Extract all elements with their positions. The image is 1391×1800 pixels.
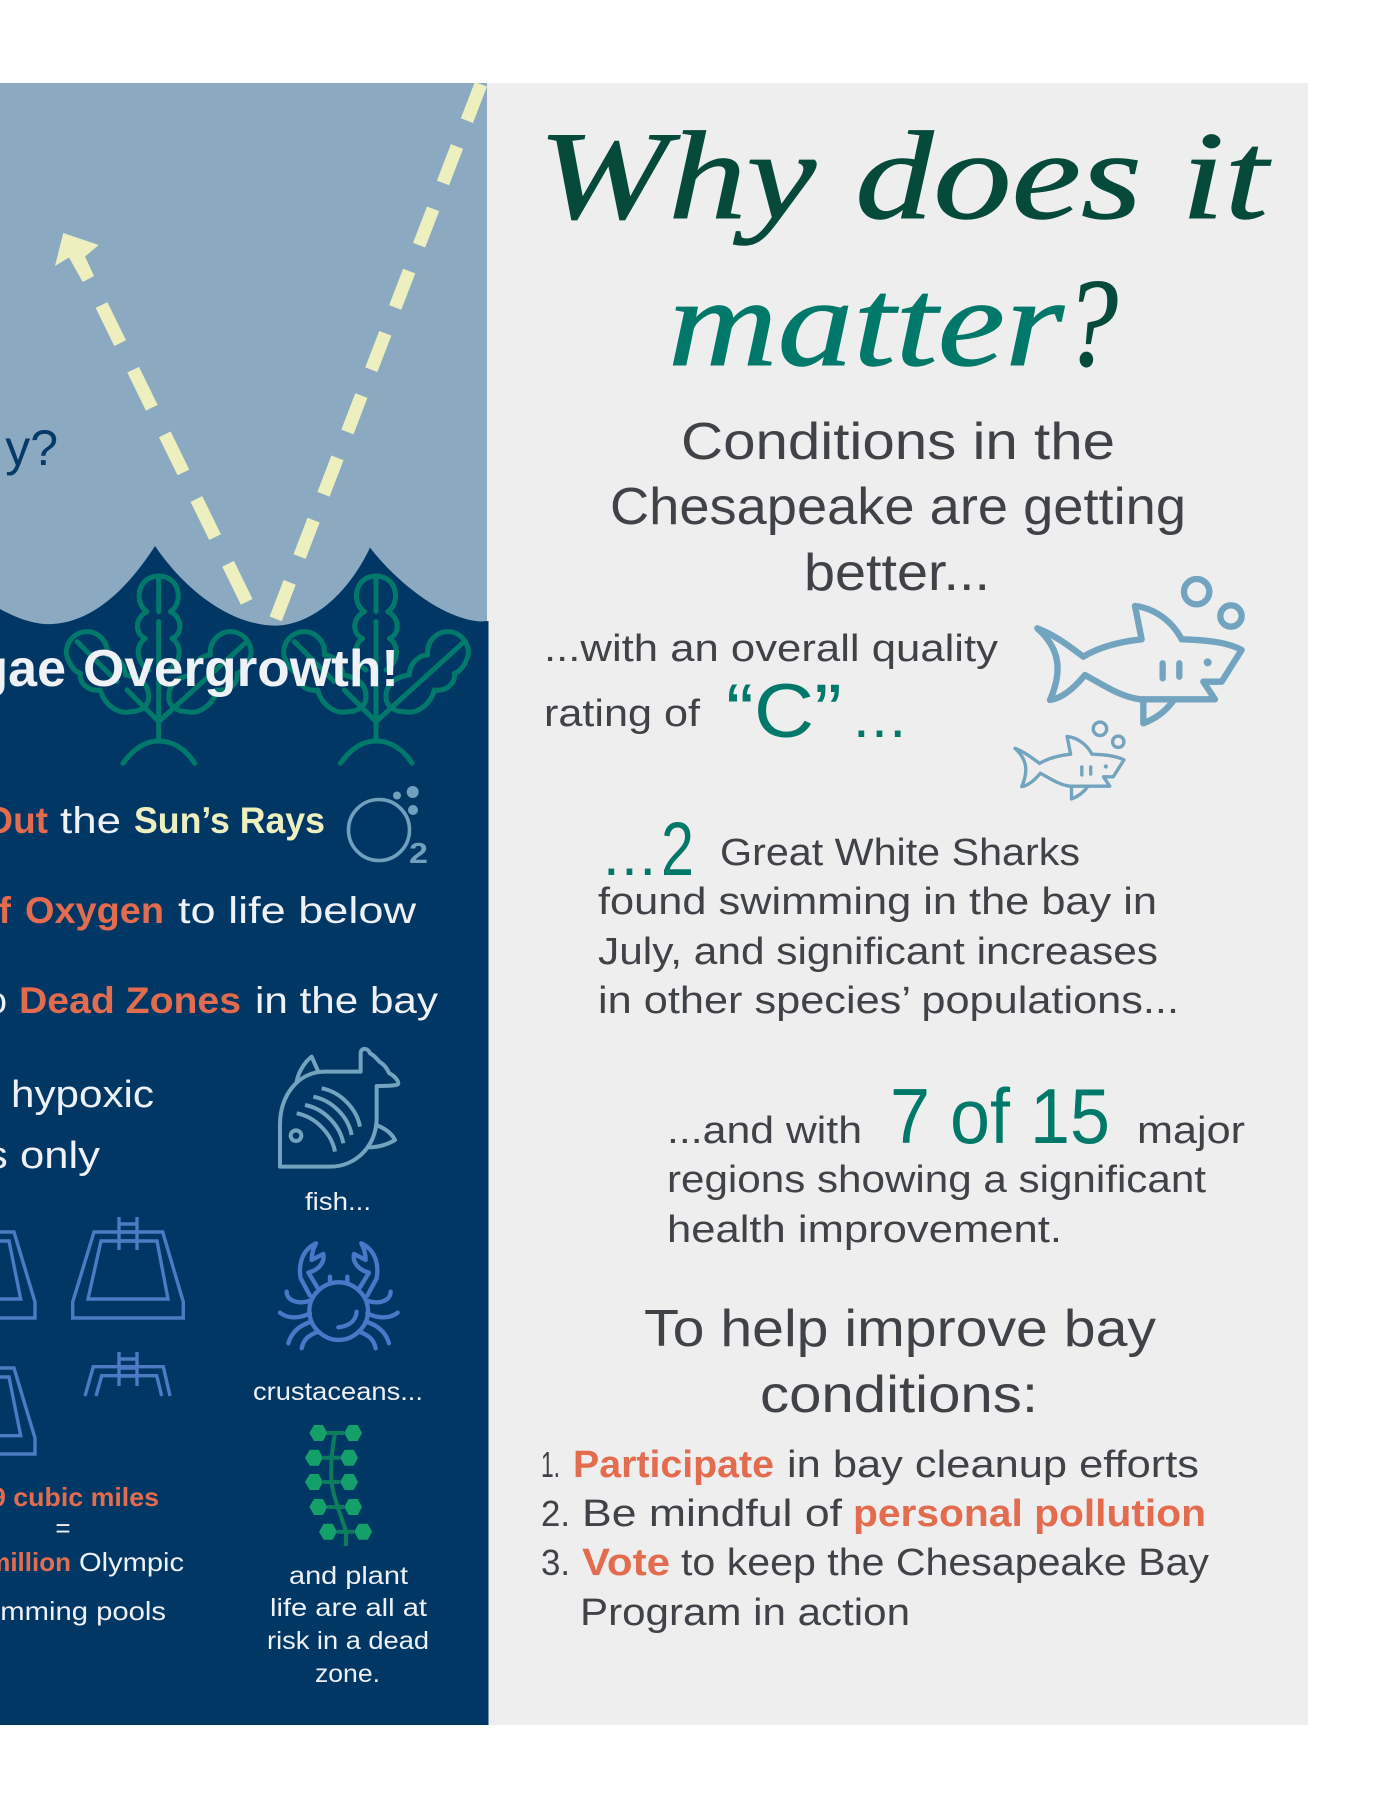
icon: algae plant right	[284, 576, 468, 763]
text: two great white sharks: ...	[603, 821, 656, 888]
title: matter: ?	[1064, 254, 1118, 393]
list: actions: to keep the Chesapeake Bay	[681, 1542, 1209, 1584]
label: fish: fish...	[305, 1188, 371, 1216]
label: crustaceans: crustaceans...	[253, 1378, 423, 1406]
text: overall quality rating	[544, 628, 998, 754]
text: blocks out the sun's rays: the	[60, 800, 121, 841]
list: actions: Program in action	[580, 1592, 910, 1634]
text: two great white sharks: July, and significant increases	[598, 931, 1158, 973]
title: why does it: Why does it	[538, 107, 1272, 246]
icon: small shark	[1015, 722, 1124, 799]
title: matter: matter	[668, 254, 1065, 393]
icon: swimming pools	[0, 1217, 183, 1454]
text: seven of fifteen regions: health improvement.	[667, 1209, 1062, 1251]
list: actions: 1.	[541, 1444, 560, 1485]
text: overall quality rating: ...with an overall quality	[544, 628, 998, 670]
heading: to help improve: conditions:	[760, 1366, 1038, 1424]
text: overall quality rating: rating of	[544, 693, 700, 735]
list: actions: 2.	[541, 1493, 570, 1534]
text: seven of fifteen regions: 7 of 15	[890, 1072, 1110, 1160]
text: conditions getting better: better...	[804, 544, 990, 602]
label: plant life at risk	[267, 1562, 429, 1688]
icon: large shark	[1037, 579, 1242, 723]
text: two great white sharks: Great White Sharks	[720, 832, 1080, 874]
text: dead zones	[0, 980, 439, 1021]
label: plant life at risk: life are all at	[270, 1594, 427, 1622]
list: actions: Be mindful of	[582, 1493, 843, 1535]
text: dead zones: Dead Zones	[19, 980, 241, 1021]
sun beam: incoming	[276, 60, 490, 619]
icon: oxygen: 2	[409, 838, 428, 870]
text: seven of fifteen regions: regions showing a significant	[667, 1159, 1206, 1201]
label: plant life at risk: and plant	[289, 1562, 408, 1590]
list: actions: in bay cleanup efforts	[787, 1444, 1199, 1486]
text: pool comparison: Olympic	[79, 1547, 184, 1577]
text: dead zones: in the bay	[255, 980, 439, 1021]
heading: to help improve: To help improve bay	[644, 1300, 1156, 1358]
text: pool comparison: =	[55, 1513, 71, 1543]
label: plant life at risk: risk in a dead	[267, 1627, 429, 1655]
list: actions: 3.	[541, 1542, 570, 1583]
text: hypoxic	[0, 1074, 154, 1177]
icon: algae plant left	[66, 576, 251, 763]
list: actions: Vote	[582, 1542, 670, 1584]
list: actions	[541, 1444, 1209, 1634]
text: two great white sharks: 2	[661, 807, 694, 892]
list: actions: personal pollution	[853, 1493, 1206, 1535]
text: overall quality rating: ...	[853, 683, 906, 750]
text: two great white sharks: in other species’ populations...	[598, 980, 1179, 1022]
text: conditions getting better: Chesapeake are getting	[610, 478, 1186, 536]
panel: sky	[0, 83, 487, 643]
text: two great white sharks	[598, 807, 1179, 1022]
text: seven of fifteen regions: major	[1137, 1110, 1245, 1152]
text: two great white sharks: found swimming in the bay in	[598, 881, 1157, 923]
icon: oxygen	[348, 786, 428, 870]
panel: water	[0, 546, 488, 1725]
text: hypoxic: hypoxic	[11, 1074, 154, 1116]
text: overall quality rating: “C”	[726, 669, 842, 754]
text: lack of oxygen: Oxygen	[25, 890, 164, 931]
text: pool comparison	[0, 1482, 184, 1626]
text: conditions getting better	[610, 413, 1186, 602]
text: seven of fifteen regions	[667, 1072, 1245, 1251]
text: blocks out the sun's rays: Sun’s Rays	[134, 800, 325, 841]
icon: fish	[280, 1049, 398, 1167]
text: blocks out the sun's rays	[0, 800, 325, 841]
list: actions: Participate	[573, 1444, 774, 1486]
icon: crab	[280, 1243, 398, 1348]
sun beam: reflected arrow	[55, 233, 247, 602]
label: plant life at risk: zone.	[315, 1660, 380, 1688]
text: lack of oxygen: to life below	[178, 890, 416, 931]
heading: to help improve	[644, 1300, 1156, 1424]
text: seven of fifteen regions: ...and with	[667, 1110, 862, 1152]
text: why question fragment: y?	[5, 420, 58, 476]
text: conditions getting better: Conditions in the	[681, 413, 1115, 471]
icon: seaweed	[305, 1425, 372, 1546]
panel: why does it matter	[487, 83, 1308, 1725]
text: lack of oxygen	[0, 890, 416, 931]
heading: algae overgrowth: Overgrowth!	[83, 640, 399, 698]
